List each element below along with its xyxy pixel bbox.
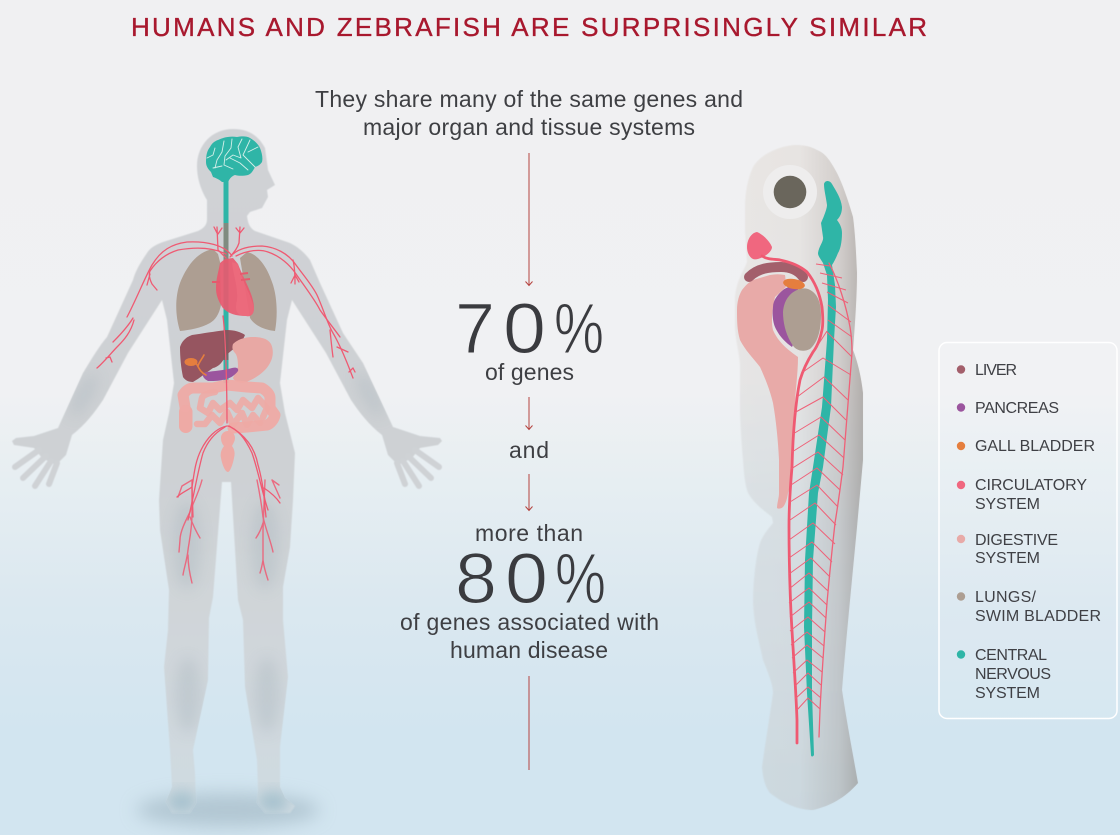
legend: circulatory system: CIRCULATORY: [975, 477, 1087, 494]
legend: [939, 342, 1117, 718]
gall bladder: [184, 355, 206, 375]
stat 80 percent: 0: [505, 540, 548, 619]
arrow 2: [526, 397, 532, 430]
liver: [180, 330, 245, 382]
legend: circulatory system: [957, 477, 1087, 513]
fish eye: [763, 165, 817, 219]
rectum: [221, 431, 235, 472]
stat 70 percent: 0: [503, 290, 546, 369]
stat 80 percent: [455, 540, 606, 619]
legend: pancreas: PANCREAS: [975, 400, 1059, 417]
disease genes text: of genes associated with: [400, 609, 659, 635]
zebrafish: [735, 145, 863, 810]
disease genes text: human disease: [450, 637, 608, 663]
arrow 3: [526, 474, 532, 510]
circulatory vessels: [97, 227, 355, 520]
human figure: [12, 129, 442, 827]
foot shadow: [136, 793, 320, 827]
legend: digestive system: [957, 532, 1058, 567]
spinal cord behind liver: [224, 330, 228, 360]
legend: gall bladder: GALL BLADDER: [975, 438, 1095, 455]
and: and: [509, 437, 549, 463]
fish liver: [749, 267, 803, 277]
arrow 1: [526, 153, 532, 286]
legend: central nervous system: [957, 647, 1051, 702]
legend: lungs and swim bladder: SWIM BLADDER: [975, 608, 1101, 625]
fish gall bladder: [782, 277, 806, 291]
more than: more than: [475, 520, 583, 546]
stat 70 percent: 7: [455, 290, 495, 369]
heart: [212, 258, 254, 316]
stat 70 percent: [455, 290, 604, 369]
spinal cord: [224, 170, 228, 383]
intro text: They share many of the same genes and: [315, 86, 743, 112]
closing line: [528, 676, 530, 770]
ribs: [789, 264, 852, 710]
fish digestive system: [737, 274, 798, 509]
fish pancreas: [773, 287, 805, 347]
legend: central nervous system: CENTRAL: [975, 647, 1047, 664]
fingers: [15, 450, 439, 486]
disease genes text: [400, 609, 659, 663]
leg vessels: [178, 480, 280, 583]
of genes: of genes: [485, 359, 574, 385]
legend: circulatory system: SYSTEM: [975, 496, 1040, 513]
stomach: [232, 337, 273, 383]
swim bladder: [783, 288, 821, 351]
body shading: [65, 369, 389, 813]
intro text: [315, 86, 743, 140]
legend: digestive system: SYSTEM: [975, 550, 1040, 567]
fish circulatory system: [747, 232, 852, 743]
central text and arrows: [315, 86, 743, 770]
intestines: [179, 385, 275, 433]
legend: liver: [957, 362, 1017, 379]
body silhouette: [12, 129, 442, 813]
feet tint: [166, 791, 289, 813]
legend: digestive system: DIGESTIVE: [975, 532, 1058, 549]
legend: liver: LIVER: [975, 362, 1017, 379]
intro text: major organ and tissue systems: [363, 114, 695, 140]
pancreas: [203, 368, 238, 381]
stat 80 percent: 8: [455, 540, 497, 619]
lungs: [176, 249, 277, 331]
fish body: [735, 145, 863, 810]
legend: lungs and swim bladder: [957, 589, 1101, 625]
title: HUMANS AND ZEBRAFISH ARE SURPRISINGLY SIMILAR: [131, 12, 927, 42]
stat 70 percent: %: [554, 290, 604, 369]
legend box: [939, 342, 1117, 718]
legend: central nervous system: NERVOUS: [975, 666, 1051, 683]
brain: [206, 136, 262, 182]
stat 80 percent: %: [555, 540, 606, 619]
legend: lungs and swim bladder: LUNGS/: [975, 589, 1037, 606]
legend: central nervous system: SYSTEM: [975, 685, 1040, 702]
fish nervous system: [804, 181, 842, 756]
